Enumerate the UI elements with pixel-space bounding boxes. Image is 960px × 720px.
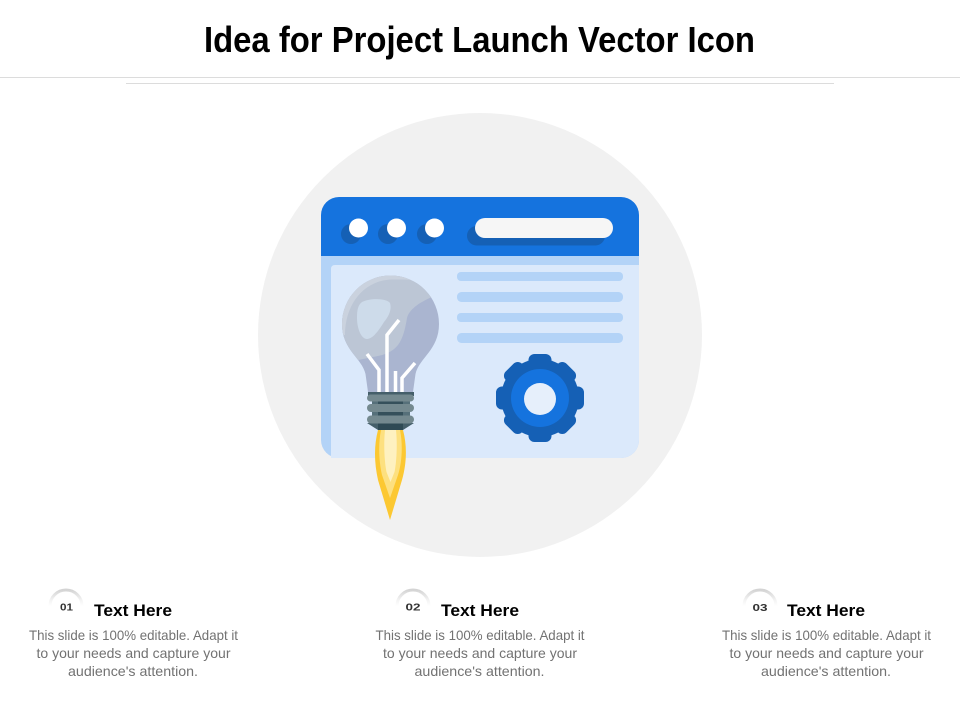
window content area [331, 265, 639, 458]
filaments [367, 320, 415, 392]
description 03 [722, 627, 931, 679]
step 02 [376, 590, 585, 679]
icon: rocket flame [375, 430, 406, 520]
lighter glass area [344, 280, 431, 360]
description 03: to your needs and capture your [730, 645, 924, 661]
description 03: audience's attention. [761, 663, 891, 679]
description 02: audience's attention. [414, 663, 544, 679]
number badge 02 [397, 590, 429, 614]
description 01: audience's attention. [68, 663, 198, 679]
number badge 03 [744, 590, 776, 614]
description 01: This slide is 100% editable. Adapt it [29, 627, 238, 643]
description 03: This slide is 100% editable. Adapt it [722, 627, 931, 643]
address bar [467, 218, 613, 246]
background circle [258, 113, 702, 557]
window body [321, 250, 639, 458]
number badge 02: 02 [406, 602, 421, 614]
description 02: This slide is 100% editable. Adapt it [376, 627, 585, 643]
header dots [341, 218, 444, 244]
step 01 [29, 590, 238, 679]
heading 01: Text Here [94, 602, 172, 620]
icon: light bulb [342, 276, 439, 430]
description 02: to your needs and capture your [383, 645, 577, 661]
title: Idea for Project Launch Vector Icon [204, 19, 755, 60]
icon: gear [496, 354, 584, 442]
step 03 [722, 590, 931, 679]
number badge 01: 01 [60, 602, 74, 614]
bulb highlight [357, 299, 391, 339]
description 01: to your needs and capture your [36, 645, 231, 661]
bulb screw base [367, 392, 414, 430]
description 02 [376, 627, 585, 679]
number badge 01 [50, 590, 82, 614]
browser window illustration [321, 197, 639, 520]
description 01 [29, 627, 238, 679]
window header bar [321, 197, 639, 256]
heading 02: Text Here [441, 602, 519, 620]
heading 03: Text Here [787, 602, 865, 620]
glass rim [342, 276, 410, 335]
number badge 03: 03 [752, 603, 768, 614]
text lines [457, 272, 623, 343]
